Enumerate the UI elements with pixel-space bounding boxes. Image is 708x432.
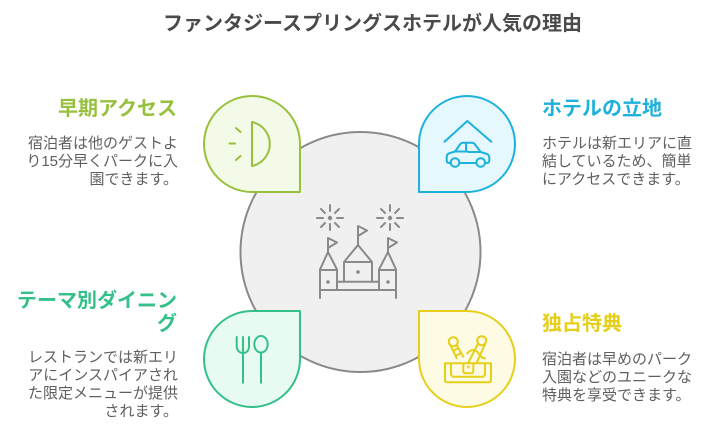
heading: themed dining: テーマ別ダイニン [17, 290, 177, 312]
panel: early access teardrop [204, 96, 300, 192]
panel: hotel location teardrop [419, 96, 515, 192]
text block: hotel location: ホテルは新エリアに直 [542, 135, 692, 152]
heading: themed dining [17, 290, 177, 335]
central circle [240, 132, 480, 372]
text block: themed dining: されます。 [104, 403, 178, 420]
heading: themed dining: グ [157, 313, 177, 335]
icon: fork and spoon [237, 337, 261, 383]
text block: themed dining: アにインスパイアされ [28, 367, 178, 384]
text block: exclusive perks: 入園などのユニークな [542, 369, 692, 386]
text block: early access: り15分早くパークに入 [26, 153, 178, 170]
text block: early access [26, 135, 178, 188]
text block: themed dining: た限定メニューが提供 [28, 385, 178, 402]
heading: early access: 早期アクセス [58, 98, 177, 120]
title: ファンタジースプリングスホテルが人気の理由 [163, 13, 582, 35]
text block: exclusive perks [542, 351, 692, 404]
text block: hotel location: 結しているため、簡単 [542, 153, 692, 170]
text block: exclusive perks: 宿泊者は早めのパーク [542, 351, 692, 368]
text block: hotel location: にアクセスできます。 [542, 171, 690, 188]
text block: hotel location [542, 135, 692, 188]
text block: early access: 宿泊者は他のゲストよ [28, 135, 178, 152]
panel: exclusive perks teardrop [419, 311, 515, 407]
icon: headlight [230, 122, 270, 166]
text block: early access: 園できます。 [89, 171, 178, 188]
icon: castle with fireworks [317, 205, 403, 298]
icon: car under roof [444, 121, 491, 163]
panel: dining teardrop [204, 311, 300, 407]
text block: themed dining: レストランでは新エリ [28, 349, 178, 366]
heading: exclusive perks: 独占特典 [542, 313, 622, 335]
text block: themed dining [28, 349, 178, 420]
icon: box with tools [445, 363, 491, 382]
heading: hotel location: ホテルの立地 [542, 98, 662, 120]
text block: exclusive perks: 特典を享受できます。 [542, 387, 691, 404]
